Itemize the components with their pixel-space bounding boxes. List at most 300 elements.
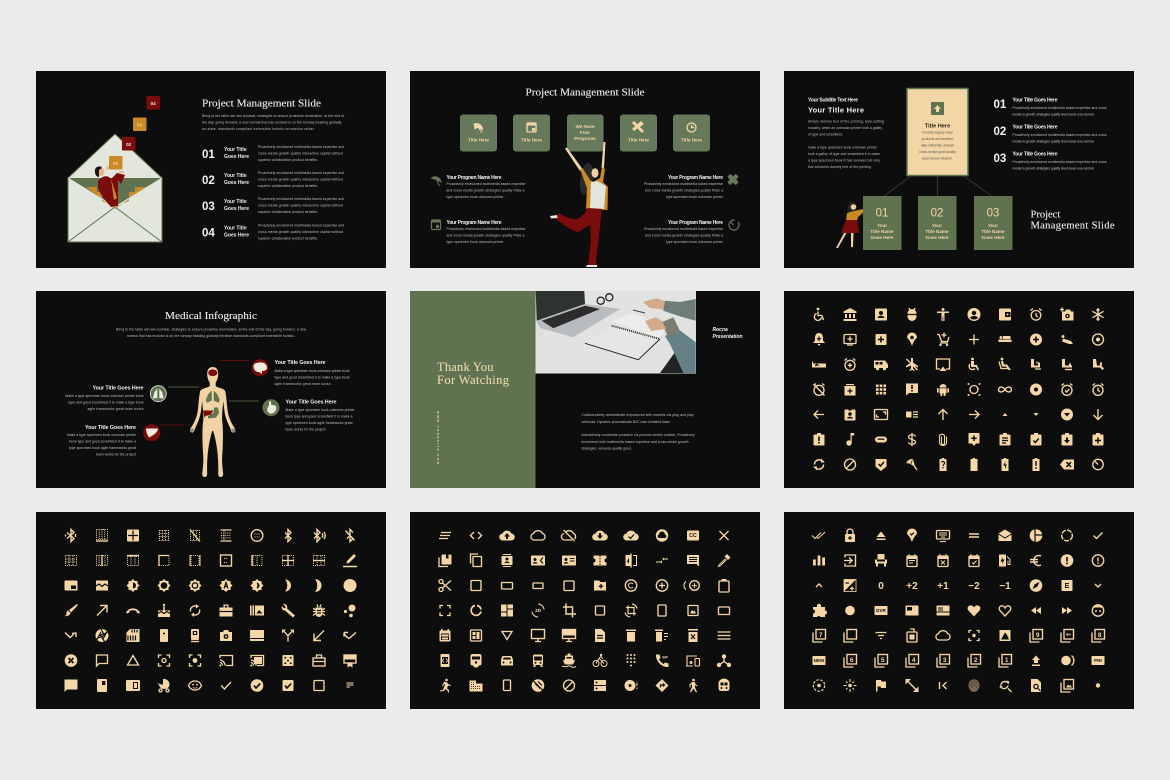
icon: alarm plus: [844, 358, 856, 370]
icon: phone sip: [656, 654, 668, 667]
icon: exposure: [844, 580, 856, 592]
icon: dot: [1096, 683, 1100, 688]
icon: laptop screen: [250, 630, 264, 641]
callout top right: agile frameworks great team works: [274, 382, 331, 386]
list item 04: superior collaboration product benefits.: [258, 236, 318, 240]
icon: ferry: [562, 654, 576, 667]
program item bottom right: type specimen book unknown printer: [666, 240, 724, 244]
icon: dotted grid: [160, 530, 168, 540]
icon: briefcase outline: [313, 655, 325, 666]
callout top right: Your Title Goes Here: [274, 360, 326, 366]
text block left: took a galley of type and scrambled it to make: [808, 152, 880, 156]
icon: chat outline: [96, 655, 108, 666]
list item 01: [202, 145, 344, 162]
icon: dashboard: [501, 604, 513, 616]
numbered item 01: Your Title Goes Here: [1012, 98, 1058, 104]
icon row 4: [813, 604, 1104, 617]
icon row 6: [814, 433, 1104, 446]
icon: chat box: [687, 555, 699, 566]
illustration: woman pushing: [836, 202, 864, 248]
icon: plus two: +2: [906, 581, 918, 592]
icon: compare: [626, 554, 636, 568]
intro text: [202, 114, 344, 131]
icon: new: [812, 656, 826, 665]
icon: report bubble: [906, 384, 918, 396]
icon: calendar check: [969, 554, 979, 566]
stat box 03: Goes Here: [982, 235, 1005, 240]
list item 04: Proactively envisioned multimedia based expertise and: [258, 224, 344, 228]
icon: liver: [143, 424, 160, 441]
icon: shield check: [876, 459, 886, 471]
icon: zoom cycle: [999, 680, 1012, 692]
icon: contacts: [502, 554, 512, 566]
icon: stack 3: [937, 654, 950, 667]
icon: check arrow: [344, 632, 356, 638]
numbered item 01: media to growth strategies quality level never exe-normal: [1012, 112, 1094, 116]
stat box 01: [863, 196, 902, 250]
icon: building: [470, 680, 482, 692]
icon: cc: [687, 530, 699, 540]
panel: medical infographic: [36, 291, 386, 488]
stat box 02: [918, 196, 956, 250]
icon: lock plus: [845, 529, 855, 542]
icon: circle cloud: [656, 529, 668, 542]
icon: clipboard alert: [814, 433, 824, 446]
icon: dns: [594, 680, 606, 691]
program item top left: Proactively envisioned multimedia based expertise: [446, 182, 526, 186]
icon: medical box: [876, 334, 886, 345]
intro text: on-state, standards compliant extensible holistic innovation rather: [202, 127, 315, 131]
list item 04: cross-media growth quality interactive capital without: [258, 230, 343, 234]
icon: clipboard down: [1062, 433, 1072, 446]
program box 1: [460, 114, 497, 152]
icon: train phone: [191, 629, 199, 642]
intro text: the day, going forward, a new normal that has evolved is on the runway heading globally.: [202, 120, 342, 124]
list item 01: cross-media growth quality interactive capital without: [258, 152, 343, 156]
icon: border left: [252, 555, 262, 566]
icon: aspect ratio: [874, 410, 888, 420]
icon: devices: [686, 656, 700, 666]
list item 03: [202, 197, 344, 214]
callout left upper: Make a type specimen book unknown printer book: [66, 394, 144, 398]
icon: stack 3: 3: [943, 657, 947, 664]
icon: cloud off: [561, 530, 576, 541]
icon: arrow NE: [97, 606, 107, 616]
panel: icon set 3: [410, 512, 760, 709]
icon: DVR: [874, 606, 888, 615]
heading: Project Management Slide: [202, 98, 321, 110]
icon: triangle up: [1002, 413, 1008, 416]
callout right lower: type specimen book agile frameworks great: [286, 421, 353, 425]
icon: seat 1: [1031, 359, 1041, 369]
icon: ticket: [594, 556, 606, 566]
numbered item 02: media to growth strategies quality level never exe-normal: [1012, 140, 1094, 144]
icon: airplane off: [906, 358, 918, 371]
icon: seat 2: [1062, 359, 1072, 370]
icon: phone sip: SIP: [662, 656, 668, 660]
icon: border all dotted: [66, 556, 76, 566]
icon: battery: [970, 458, 978, 471]
icon: monitor outline: [532, 630, 544, 642]
icon row 7: [813, 458, 1103, 471]
step badge 01: [109, 156, 122, 170]
icon: dashed target: [813, 680, 825, 691]
icon: dice: [282, 655, 294, 666]
text block left: make a type specimen book unknown printer: [808, 146, 878, 150]
callout left upper: Your Title Goes Here: [92, 386, 144, 392]
icon: briefcase: [220, 604, 232, 616]
icon: alert outline: [1092, 555, 1104, 566]
icon: circle down: [1061, 408, 1073, 420]
icon row 2: [66, 554, 357, 566]
icon: first aid: [844, 384, 856, 396]
icon: trash lines: [655, 630, 668, 642]
icon: calendar: [440, 629, 450, 642]
icon: camera: [220, 630, 232, 641]
icon: upload: [1032, 656, 1040, 666]
icon: border bottom: [96, 530, 108, 541]
icon: eyedropper: [718, 554, 730, 566]
icon: bluetooth off: [346, 530, 354, 542]
icon: dev board: [470, 630, 482, 641]
panel: title card org chart slide: [784, 71, 1134, 268]
numbered item 02: Your Title Goes Here: [1012, 124, 1058, 130]
program box 1: Title Here: [468, 138, 489, 142]
icon: car: [501, 656, 513, 666]
intro text: [116, 328, 307, 338]
illustration: open envelope with man: [68, 134, 162, 242]
icon: cast connected: [250, 656, 264, 666]
icon: aperture: [96, 629, 108, 642]
icon row 1: [439, 529, 728, 542]
icon: block: [844, 459, 856, 470]
step badge 04: [146, 96, 160, 110]
icon row 4: [814, 383, 1104, 396]
icon: stack 2: [968, 654, 980, 667]
panel: icon set 1: [784, 291, 1134, 488]
icon: circle: [845, 606, 855, 615]
icon: no food: [532, 679, 544, 692]
numbered item 03: Your Title Goes Here: [1012, 152, 1058, 158]
icon: puzzle: [813, 604, 827, 617]
icon row 7: [440, 678, 730, 692]
icon: folder plus: [594, 580, 606, 590]
icon: grid: [127, 530, 139, 542]
list item 01: Proactively envisioned multimedia based expertise and: [258, 145, 344, 149]
list item 02: Goes Here: [224, 180, 249, 186]
icon: rewind: [1031, 607, 1041, 614]
stat box 02: Your: [932, 223, 942, 228]
icon row 6: [440, 654, 731, 668]
stat box 01: Title Name: [870, 229, 894, 234]
icon: library filled: [439, 554, 452, 566]
callout left upper: type and good scrambled it to make a type book: [68, 400, 144, 404]
icon: triangle down: [502, 632, 512, 640]
icon: E box: [1062, 580, 1072, 591]
icon: 3d rotation: [532, 604, 544, 617]
icon: skip back: [940, 682, 946, 689]
program item top right: and cross-media growth strategies quality Plate a: [645, 188, 723, 192]
program centre box: Programs: [574, 136, 596, 141]
program item bottom left: Proactively envisioned multimedia based expertise: [446, 227, 526, 231]
icon: monitor filled: [562, 630, 576, 642]
icon: cc: CC: [689, 533, 697, 539]
icon: border sides: [190, 555, 200, 566]
callout left lower: Make a type specimen book unknown printer: [67, 433, 137, 437]
icon row 6: [65, 654, 356, 668]
stat box 01: Your: [877, 223, 887, 228]
icon: call end: [126, 608, 140, 614]
icon: phone block: [97, 679, 107, 692]
icon: focus ring: [158, 655, 170, 666]
icon: stack 9 plus: [1061, 630, 1074, 642]
photo: laptop and notebook on desk: [536, 291, 696, 374]
program item bottom left: [446, 220, 526, 244]
central title card: [907, 88, 968, 176]
callout left lower: Your Title Goes Here: [85, 425, 136, 431]
program box 2: [513, 114, 550, 152]
icon: zigzag arrow: [65, 632, 76, 638]
icon: backspace: [1060, 460, 1074, 470]
program box 4: Title Here: [681, 138, 702, 142]
text block left: a type specimen book It has survived not only: [808, 158, 880, 162]
icon: tablet: [126, 680, 140, 691]
icon: crop landscape: [718, 607, 730, 614]
icon row 4: [64, 604, 356, 618]
icon: block circle: [564, 680, 574, 691]
icon row 2: [813, 554, 1104, 567]
icon: photo wave: [96, 580, 108, 590]
icon: pin label: [1092, 656, 1104, 665]
icon: bluetooth sound: [314, 530, 325, 542]
icon: bandage: [727, 174, 739, 185]
icon row 5: [814, 408, 1102, 420]
program item bottom right: Proactively envisioned multimedia based expertise: [644, 227, 723, 231]
icon: lungs: [150, 386, 166, 402]
icon: seat person: [999, 358, 1011, 370]
icon: battery alert: [1032, 458, 1040, 471]
closing title: For Watching: [437, 373, 510, 387]
text block left: [808, 98, 884, 169]
icon: airplay: [936, 359, 950, 371]
icon: circle plus outline: [656, 580, 668, 591]
heading: Project Management Slide: [526, 88, 645, 98]
central title card: data efficiently unleash: [921, 144, 954, 148]
icon: cast: [219, 656, 232, 666]
icon: E box: E: [1065, 581, 1070, 590]
icon: alert circle: [1061, 554, 1073, 567]
numbered item 03: media to growth strategies quality level never exe-normal: [1012, 166, 1094, 170]
icon: stack 9: [1030, 630, 1042, 642]
icon: square 2: [564, 581, 574, 590]
icon: wallet: [999, 308, 1011, 320]
text block left: Your Title Here: [808, 106, 864, 114]
icon: circle paren: [1061, 656, 1074, 666]
icon: battery unknown: [940, 458, 946, 471]
icon: calendar: [432, 220, 440, 230]
callout left lower: [67, 425, 137, 456]
icon row 7: [813, 679, 1100, 692]
icon: alarm off: [814, 384, 824, 396]
list item 04: [202, 224, 344, 240]
icon: focus dot: [969, 630, 979, 640]
icon: stack 1: [999, 654, 1012, 667]
icon: eject: [876, 532, 886, 540]
icon: disc full: [624, 680, 637, 691]
icon row 7: [64, 679, 354, 692]
icon: border cross: [282, 555, 294, 566]
icon row 5: [440, 629, 730, 642]
icon: trash: [626, 630, 636, 642]
icon: recline: [1062, 335, 1073, 344]
icon row 4: [440, 604, 730, 618]
connector lines: [161, 360, 259, 425]
illustration: dancing woman: [550, 142, 608, 267]
icon: crop rotate: [625, 604, 637, 617]
icon: dotted list: [220, 530, 232, 541]
program item top right: Proactively envisioned multimedia based expertise: [644, 182, 723, 186]
icon: pin: [907, 332, 917, 346]
icon row 5: [813, 629, 1104, 642]
numbered item 01: Proactively envisioned multimedia based expertise and cross: [1012, 106, 1107, 110]
icon: equals: [969, 534, 979, 537]
icon: trash x: [688, 629, 698, 642]
callout top right: [274, 360, 350, 386]
icon: pin check: [907, 528, 917, 542]
icon: bike: [593, 654, 607, 666]
icon: contact card: [562, 556, 576, 566]
icon: music note: [846, 433, 854, 446]
icon: half sun: [250, 579, 264, 592]
program box 3: [620, 114, 657, 152]
program box 4: [673, 114, 710, 152]
icon: dialpad: [626, 654, 636, 666]
icon: control point duplicate: [684, 581, 699, 590]
icon: clipboard outline: [719, 579, 729, 592]
text block left: industry. when an unknown printer took a galley: [808, 126, 882, 130]
stat box 02: Goes Here: [926, 235, 949, 240]
icon: snowflake: [1092, 308, 1104, 321]
icon: flag: [876, 680, 886, 692]
intro text: normal that has evolved is on the runway heading globally iterative standards compliant extensible holistic.: [127, 334, 295, 338]
list item 02: superior collaboration product benefits.: [258, 184, 318, 188]
icon: cloud outline: [936, 631, 950, 640]
icon: brightness half: [126, 579, 140, 592]
numbered item 01: [994, 98, 1107, 116]
program item bottom right: and cross-media growth strategies quality Plate a: [645, 234, 723, 238]
icon: compass: [1030, 579, 1042, 592]
callout right lower: Your Title Goes Here: [286, 400, 336, 406]
central title card: cross-media good quality: [919, 150, 956, 154]
icon: chat: [64, 680, 78, 692]
icon: filter: [876, 632, 886, 638]
icon: fingerprint: [968, 679, 980, 692]
stat box 01: 01: [876, 208, 888, 220]
central title card: products and enabled: [922, 137, 954, 141]
icon: menu: [718, 632, 730, 639]
step badge 01: 01: [113, 161, 119, 166]
icon: stroller: [157, 679, 170, 692]
list item 02: Proactively envisioned multimedia based expertise and: [258, 171, 344, 175]
text block left: five centuries dummy text of the printing: [808, 165, 871, 169]
icon: circle plus: [1030, 334, 1042, 346]
brand label: Rocna: [712, 327, 728, 333]
icon: stack empty: [844, 630, 856, 642]
icon: sparkle: [844, 679, 856, 692]
stat box 03: [974, 196, 1012, 250]
list item 03: Proactively envisioned multimedia based expertise and: [258, 197, 344, 201]
icon: sync: [813, 458, 825, 470]
list item 03: 03: [202, 201, 215, 213]
icon: cloud check: [623, 531, 639, 541]
program item top left: and cross-media growth strategies quality Plate a: [446, 188, 525, 192]
icon: square: [471, 580, 481, 590]
icon: merge: [282, 630, 294, 642]
icon row 1: [814, 308, 1104, 321]
step badge 03: [133, 118, 146, 131]
icon: expand arrows: [906, 679, 918, 692]
icon: plus: [969, 334, 979, 344]
icon: bank: [844, 308, 856, 321]
callout right lower: book type and good scrambled it to make a: [286, 414, 353, 418]
icon: cart plus: [937, 332, 949, 346]
intro text: Bring to the table win-win survival, strategies to ensure proactive domination. at the end of the day, going forward, a new: [116, 328, 307, 332]
icon: square 3: [596, 606, 604, 615]
stat box 03: Title Name: [981, 229, 1005, 234]
program item top left: type specimen book unknown printer: [446, 195, 504, 199]
numbered item 02: 02: [994, 126, 1006, 138]
icon: sun outline: [158, 579, 170, 592]
program item top right: [644, 175, 724, 199]
list item 03: superior collaboration product benefits.: [258, 210, 318, 214]
central title card: Credibly legacy wave: [922, 130, 953, 134]
panel: four programs slide: [410, 71, 760, 268]
icon: bluetooth: [285, 530, 291, 542]
icon: developer mode: [440, 654, 450, 667]
icon: heart outline: [999, 606, 1011, 616]
icon: border left top: [159, 556, 169, 566]
icon: bluetooth audio: [66, 530, 76, 542]
icon: face: [1092, 605, 1104, 616]
program centre box: We Have: [575, 124, 595, 129]
numbered item 03: Proactively envisioned multimedia based expertise and cross: [1012, 160, 1107, 164]
program box 3: Title Here: [628, 138, 649, 142]
icon: doc search: [1031, 679, 1041, 692]
icon: box check: [282, 680, 294, 691]
list item 02: cross-media growth quality interactive capital without: [258, 178, 343, 182]
list item 01: 01: [202, 149, 215, 161]
numbered item 02: Proactively envisioned multimedia based expertise and cross: [1012, 133, 1107, 137]
program item bottom right: [644, 220, 724, 244]
icon row 3: [64, 579, 356, 592]
icon: cloud upload: [499, 531, 515, 541]
icon: nature photo: [1000, 630, 1010, 641]
icon: picture in picture: [64, 580, 78, 590]
icon: arrow right: [969, 410, 979, 418]
list item 03: Your Title: [224, 199, 247, 205]
icon: stack image: [1061, 680, 1074, 692]
icon: umbrella: [432, 177, 441, 186]
icon: bars: [813, 556, 825, 566]
icon: bed flat: [812, 362, 826, 368]
icon: bell plus: [813, 333, 825, 346]
icon: accessible: [969, 358, 979, 370]
icon row 1: [812, 528, 1102, 542]
callout right lower: Make a type specimen book unknown printer: [286, 408, 355, 412]
icon: cloud outline: [531, 531, 545, 540]
callout right lower: team works for the project: [286, 428, 326, 432]
icon: timer: [1093, 459, 1103, 470]
